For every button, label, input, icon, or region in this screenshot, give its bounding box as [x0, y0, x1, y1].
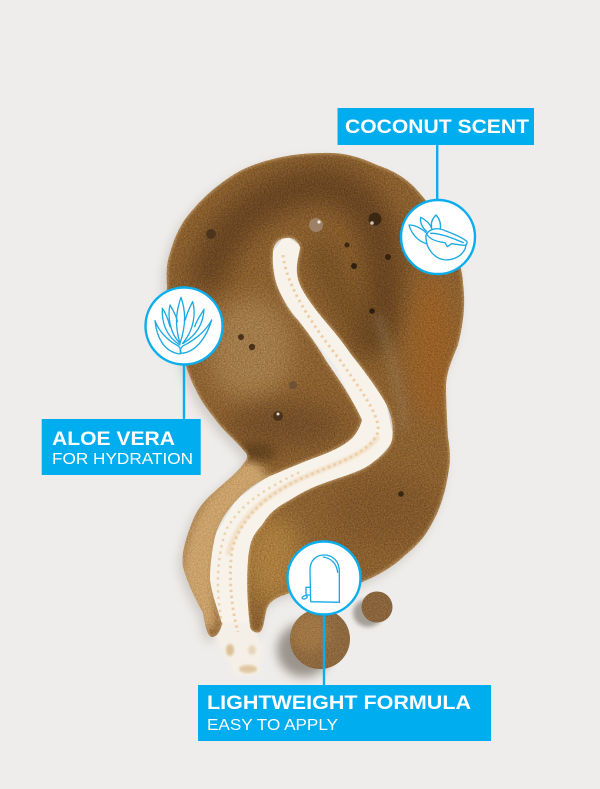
small drop shadow [353, 599, 383, 627]
connector line [183, 363, 185, 421]
connector line [436, 144, 438, 202]
foam rim highlight [166, 153, 464, 637]
heading: COCONUT SCENT [345, 116, 529, 138]
cream channel second stripe [218, 472, 300, 625]
large foam drop [277, 609, 350, 677]
label box [198, 685, 491, 741]
foam body [160, 145, 470, 645]
cream tail end [207, 622, 262, 676]
left lobe tone [208, 298, 292, 402]
left tail tone [197, 468, 262, 630]
dark upper arc [205, 185, 386, 336]
cream channel [205, 235, 394, 630]
subheading: FOR HYDRATION [52, 451, 193, 468]
tail specks [224, 642, 260, 675]
cream channel tan stripes [230, 255, 378, 632]
large drop shadow [277, 623, 331, 677]
callout: coconut scent [338, 108, 534, 274]
foam product swirl [160, 145, 470, 676]
icon: tanning mitt [288, 542, 360, 614]
heading: LIGHTWEIGHT FORMULA [207, 692, 471, 714]
icon: coconut [401, 200, 475, 274]
callout: aloe vera [42, 288, 223, 475]
lower lobe tone [337, 479, 433, 540]
connector line [323, 614, 325, 686]
droplets [206, 212, 404, 497]
label box [42, 419, 201, 475]
darker lobe lower edge [225, 401, 345, 449]
lower left lobe tone [242, 515, 302, 605]
foam bubble texture [160, 145, 470, 645]
subheading: EASY TO APPLY [207, 717, 338, 734]
icon: aloe plant [146, 288, 222, 364]
foam soft shadow [162, 158, 460, 642]
pale crease right [378, 315, 404, 430]
small foam drop [353, 591, 393, 627]
heading: ALOE VERA [52, 428, 175, 450]
cream channel tan glow [228, 436, 378, 555]
callout: lightweight formula [198, 542, 491, 741]
neck shadow [236, 443, 276, 461]
warm right side [408, 275, 456, 425]
inner dark beside channel [318, 240, 372, 345]
label box [338, 108, 534, 145]
